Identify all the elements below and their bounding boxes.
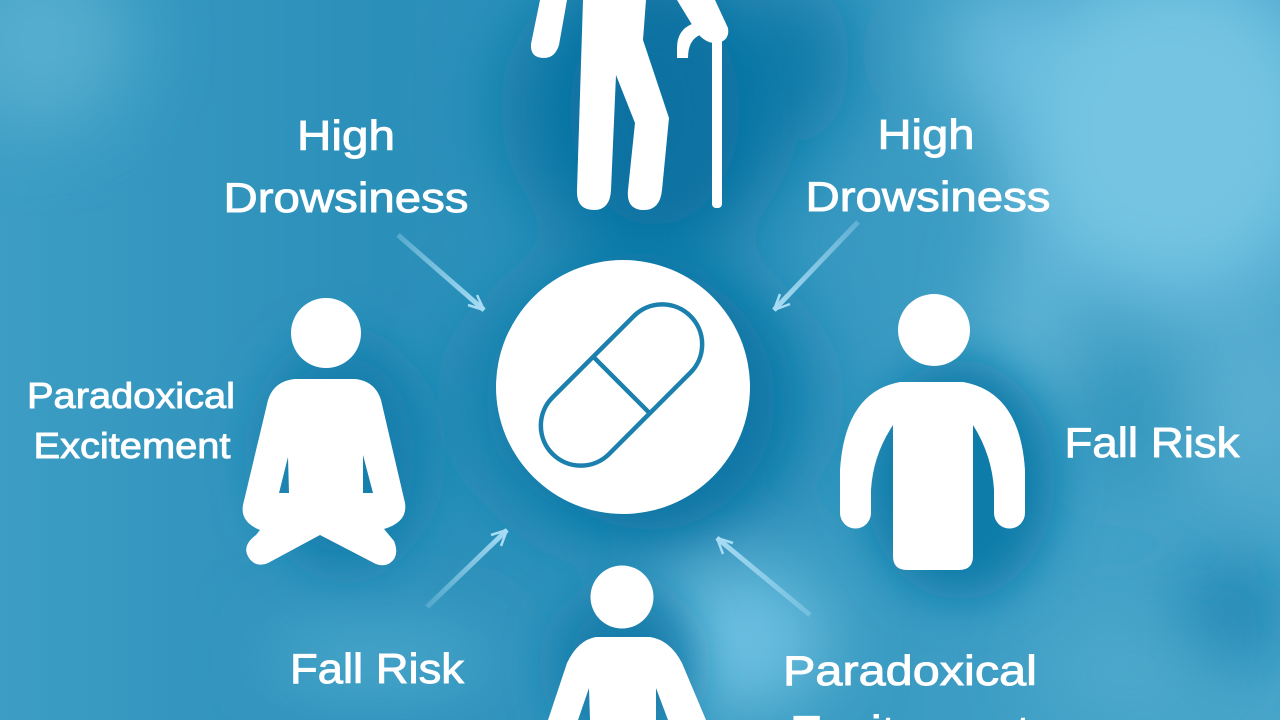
heading: top-left label: Drowsiness — [224, 174, 468, 221]
label: paradoxical excitement bottom — [783, 647, 1037, 720]
icon: standing person right — [840, 294, 1025, 570]
label: paradoxical excitement left: Excitement — [34, 425, 230, 466]
label: paradoxical excitement left — [27, 375, 235, 466]
heading: top-right label — [806, 111, 1050, 220]
icon: elderly person with cane — [531, 0, 728, 210]
icon: pill in white circle — [496, 260, 750, 514]
label: paradoxical excitement left: Paradoxical — [27, 375, 235, 416]
heading: top-left label: High — [297, 112, 395, 159]
icon: seated person — [243, 298, 405, 565]
label: paradoxical excitement bottom: Paradoxical — [783, 647, 1037, 694]
label: fall risk bottom: Fall Risk — [290, 645, 465, 692]
arrow: top-right to pill — [774, 222, 858, 310]
arrow: bottom-right to pill — [717, 538, 810, 615]
heading: top-left label — [224, 112, 468, 221]
arrow: bottom-left to pill — [427, 530, 507, 607]
label: fall risk right: Fall Risk — [1064, 419, 1241, 466]
arrow: top-left to pill — [398, 235, 484, 310]
heading: top-right label: High — [878, 111, 974, 158]
icon: standing person bottom — [548, 566, 706, 720]
heading: top-right label: Drowsiness — [806, 173, 1050, 220]
